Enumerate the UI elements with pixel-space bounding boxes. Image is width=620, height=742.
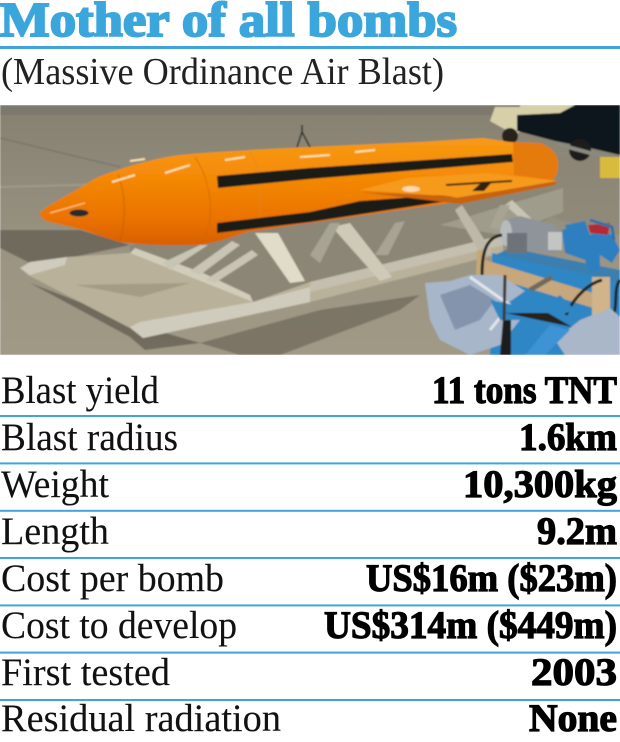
bomb tail shading	[513, 142, 558, 180]
hydraulic stand: wooden frame	[475, 250, 610, 320]
frame backing under bomb	[130, 195, 496, 302]
row: Residual radiation: None	[529, 697, 617, 740]
row: Weight	[0, 463, 620, 512]
support trusses	[162, 200, 538, 283]
title rule	[0, 46, 620, 49]
row: Residual radiation: Residual radiation	[1, 697, 281, 740]
upper black stripe	[217, 154, 513, 188]
row: Cost per bomb	[0, 557, 620, 606]
floor patches	[0, 106, 556, 355]
row: Cost to develop	[0, 604, 620, 654]
row: First tested: 2003	[531, 651, 617, 694]
bomb body	[40, 138, 558, 245]
row: Blast yield	[0, 369, 620, 417]
blue base top	[495, 248, 620, 283]
row: Blast radius	[0, 416, 620, 464]
nose vent	[70, 210, 88, 216]
row: Residual radiation	[1, 697, 617, 740]
row: Blast radius: Blast radius	[1, 416, 178, 459]
photo: orange bomb on trailer	[0, 105, 620, 355]
row: Weight: 10,300kg	[463, 463, 618, 506]
row: First tested	[0, 651, 620, 701]
subtitle: (Massive Ordinance Air Blast)	[1, 51, 444, 93]
tripod marker	[297, 125, 310, 147]
lower black stripe	[217, 193, 500, 233]
row: Cost to develop: Cost to develop	[1, 604, 237, 647]
trailer deck	[20, 188, 563, 338]
row: Length: 9.2m	[537, 510, 617, 553]
row: Weight: Weight	[1, 463, 109, 506]
electric motor	[500, 216, 565, 253]
row: First tested: First tested	[1, 651, 170, 694]
row: Cost per bomb: Cost per bomb	[1, 557, 224, 600]
hoses	[476, 235, 620, 320]
blue tarp	[425, 275, 620, 355]
row: Length	[0, 510, 620, 559]
row: Blast yield: Blast yield	[1, 369, 159, 412]
vehicles in background	[490, 105, 620, 178]
jack stand	[500, 275, 572, 355]
blue base	[490, 253, 620, 355]
hangar floor	[0, 105, 620, 355]
row: Length: Length	[1, 510, 109, 553]
section seams and highlights	[50, 150, 375, 243]
tail fin	[360, 173, 558, 204]
blue pump	[562, 220, 620, 273]
row: Blast radius: 1.6km	[519, 416, 617, 459]
